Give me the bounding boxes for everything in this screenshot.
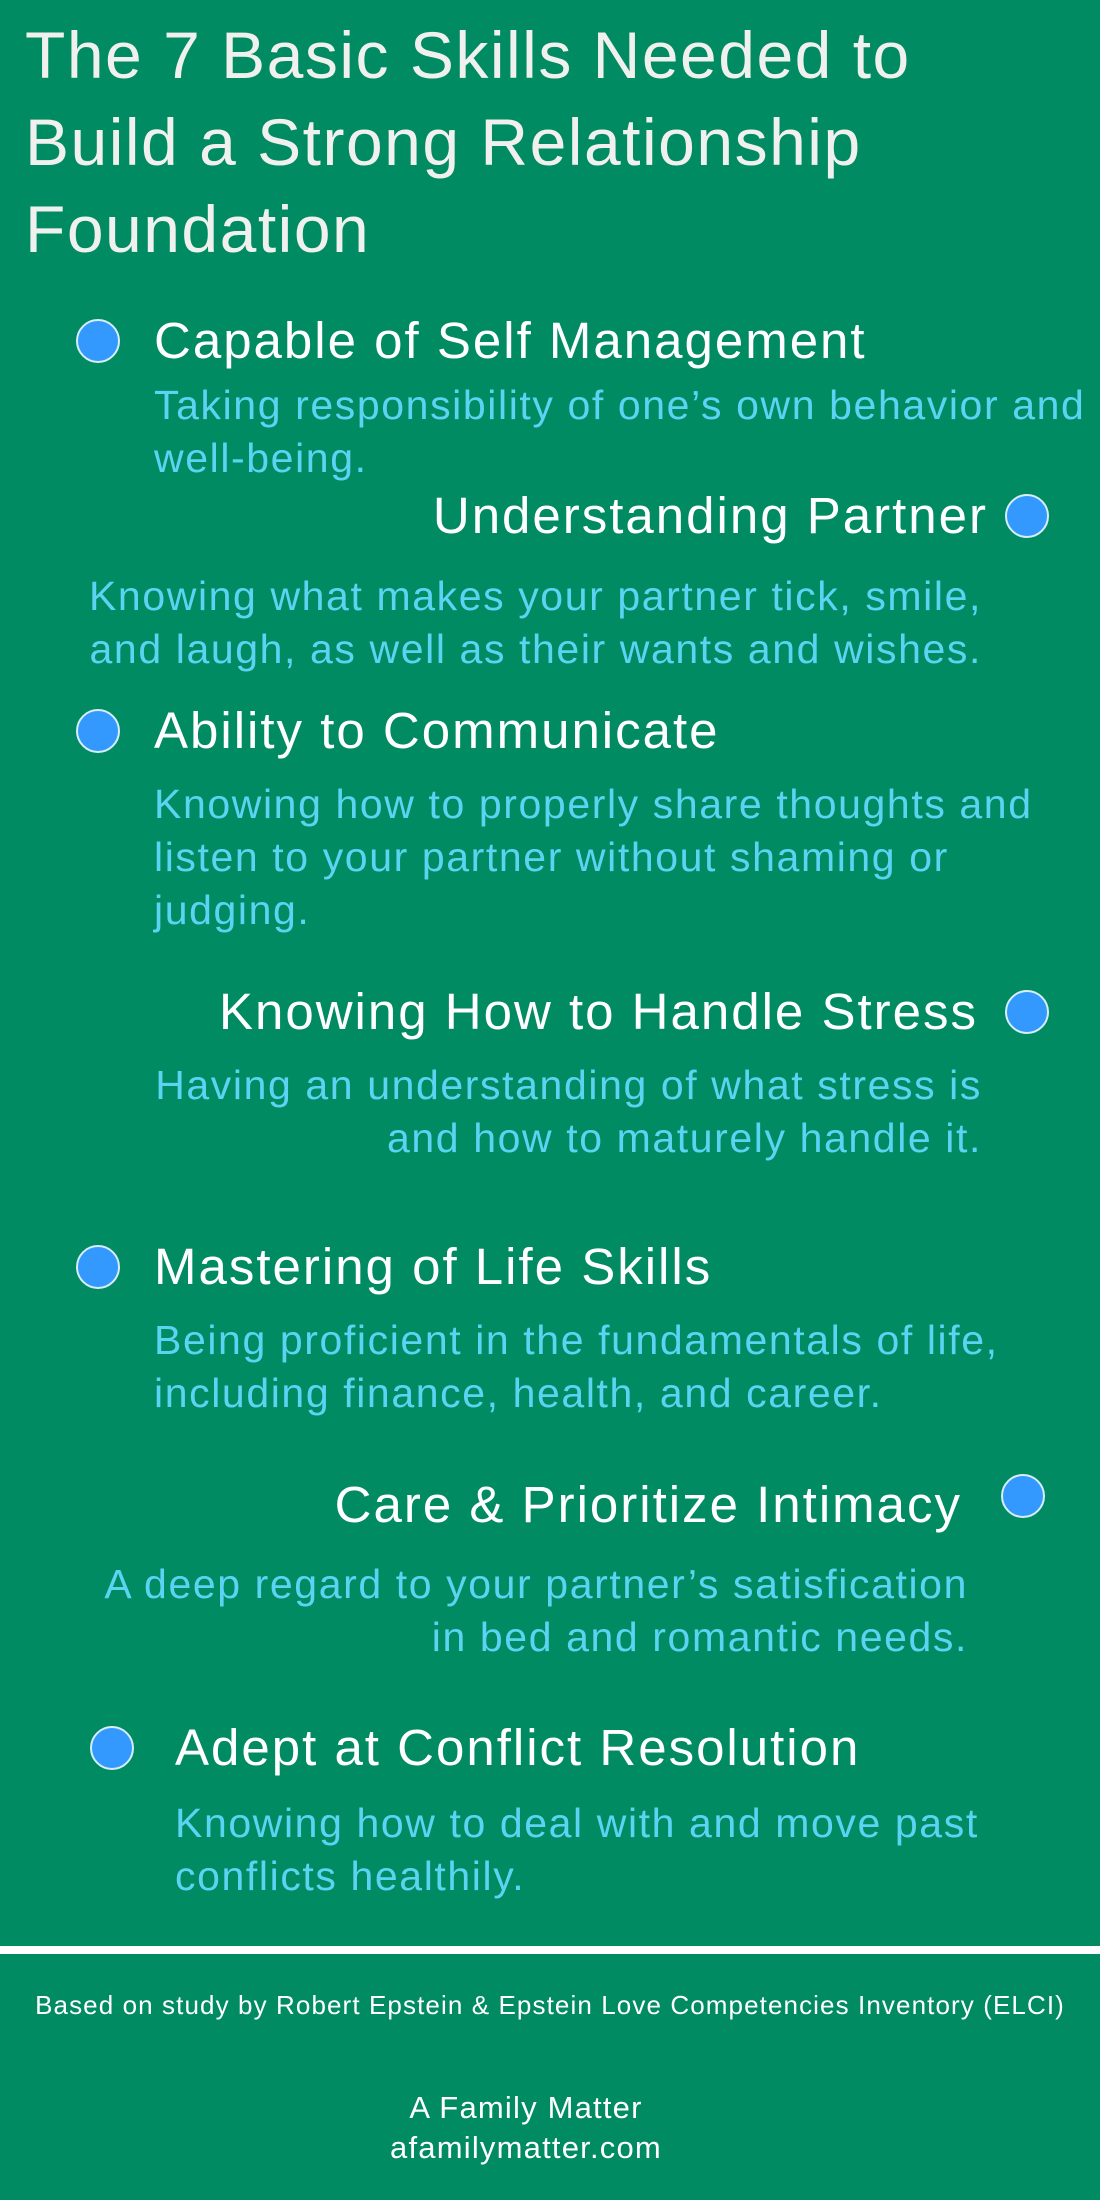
heading 5: Mastering of Life Skills [154,1238,712,1295]
icon: circle 4 [1005,990,1049,1034]
description 2: Knowing what makes your partner tick, smile, [89,573,982,619]
title: Foundation [25,192,370,266]
item 5: life skills [76,1238,999,1416]
item 4: stress [155,983,1049,1161]
title [25,18,911,266]
description 5: Being proficient in the fundamentals of life, [154,1317,999,1363]
icon: circle 3 [76,709,120,753]
description 2: and laugh, as well as their wants and wishes. [90,626,982,672]
heading 7: Adept at Conflict Resolution [175,1719,860,1776]
description 3: listen to your partner without shaming or [154,834,949,880]
item 7: conflict resolution [90,1719,979,1899]
description 4 [155,1062,982,1161]
description 1 [154,382,1085,481]
heading 6: Care & Prioritize Intimacy [335,1476,962,1533]
description 1: Taking responsibility of one’s own behavior and [154,382,1085,428]
item 1: self management [76,312,1085,481]
description 6: in bed and romantic needs. [432,1614,968,1660]
description 7: Knowing how to deal with and move past [175,1800,979,1846]
title: The 7 Basic Skills Needed to [25,18,911,92]
description 4: and how to maturely handle it. [387,1115,982,1161]
icon: circle 1 [76,319,120,363]
description 2 [89,573,982,672]
item 3: communicate [76,702,1033,933]
description 1: well-being. [154,435,368,481]
description 3 [153,781,1033,933]
description 5: including finance, health, and career. [154,1370,883,1416]
title: Build a Strong Relationship [25,105,862,179]
icon: circle 2 [1005,494,1049,538]
icon: circle 6 [1001,1474,1045,1518]
description 3: Knowing how to properly share thoughts and [154,781,1033,827]
icon: circle 5 [76,1245,120,1289]
heading 2: Understanding Partner [433,487,988,544]
heading 4: Knowing How to Handle Stress [219,983,978,1040]
item 2: understanding partner [89,487,1049,672]
description 6 [104,1561,968,1660]
icon: circle 7 [90,1726,134,1770]
footer brand: afamilymatter.com [390,2130,662,2165]
heading 3: Ability to Communicate [154,702,720,759]
item 6: intimacy [104,1474,1045,1660]
description 7 [175,1800,979,1899]
footer brand: A Family Matter [409,2090,643,2125]
description 3: judging. [154,887,310,933]
footer source note: Based on study by Robert Epstein & Epstein Love Competencies Inventory (ELCI) [35,1990,1065,2020]
description 4: Having an understanding of what stress is [155,1062,982,1108]
heading 1: Capable of Self Management [154,312,867,369]
description 5 [154,1317,999,1416]
description 6: A deep regard to your partner’s satisfication [104,1561,968,1607]
footer brand [390,2090,662,2165]
description 7: conflicts healthily. [175,1853,525,1899]
